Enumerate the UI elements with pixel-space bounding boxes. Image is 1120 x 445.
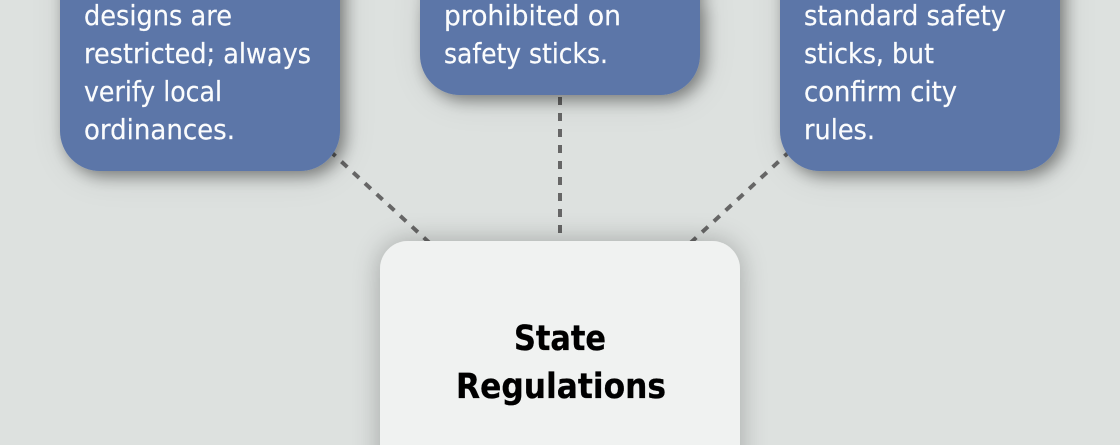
left card text: restricted; always [84, 38, 311, 70]
panel: right card [780, 0, 1060, 171]
connector: right card to state regulations [690, 154, 787, 243]
right card text: rules. [804, 114, 875, 146]
right card text [804, 0, 1006, 146]
right card text: confirm city [804, 76, 957, 108]
panel: state regulations [380, 241, 740, 445]
connector: centre card to state regulations [558, 97, 562, 233]
left card text: verify local [84, 76, 222, 108]
connector: left card to state regulations [333, 154, 430, 243]
centre card text [444, 0, 621, 70]
heading: state regulations: State [514, 319, 606, 359]
panel: centre card [420, 0, 700, 95]
left card text: designs are [84, 0, 232, 32]
heading: state regulations: Regulations [456, 367, 666, 407]
left card text [84, 0, 311, 146]
left card text: ordinances. [84, 114, 235, 146]
heading: state regulations [456, 319, 666, 407]
right card text: sticks, but [804, 38, 934, 70]
panel: left card [60, 0, 340, 171]
centre card text: safety sticks. [444, 38, 608, 70]
centre card text: prohibited on [444, 0, 621, 32]
right card text: standard safety [804, 0, 1006, 32]
